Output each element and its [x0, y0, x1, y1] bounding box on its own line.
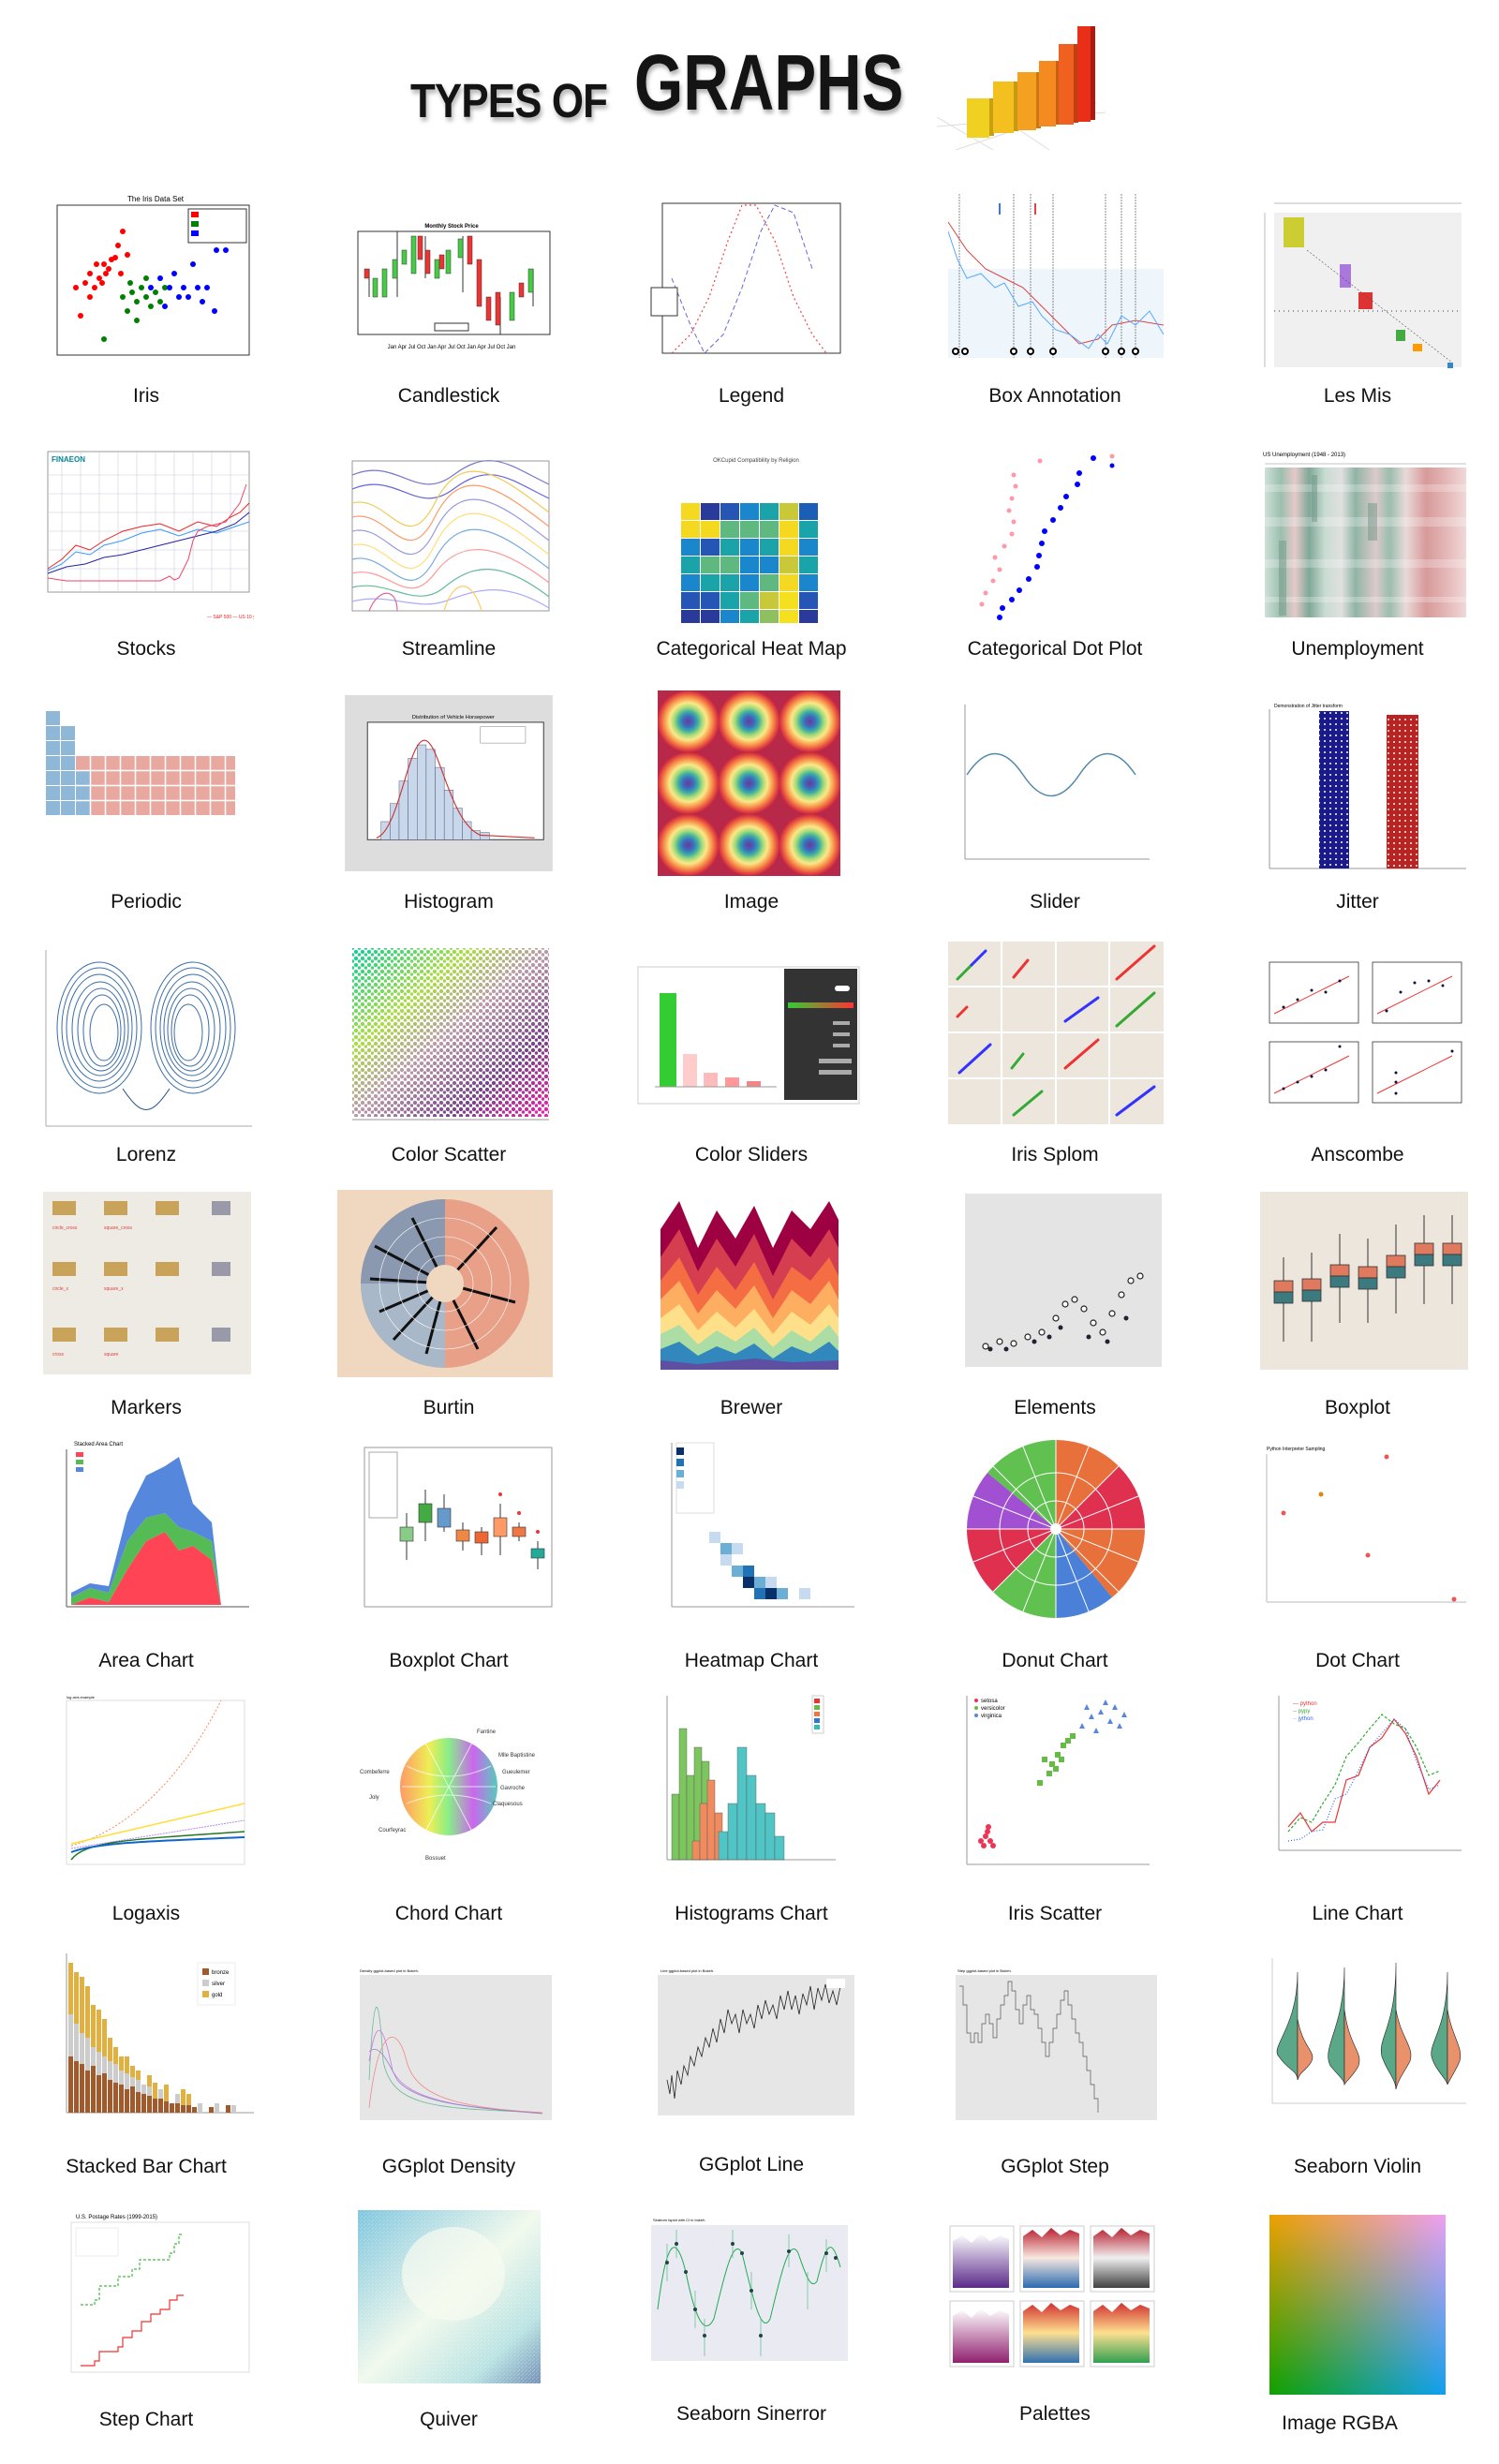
label: GGplot Step: [1001, 2156, 1109, 2177]
label: Dot Chart: [1315, 1650, 1400, 1671]
chart: streamline: [352, 460, 549, 611]
label: Iris Splom: [1011, 1144, 1099, 1165]
chart: line chart: [1278, 1696, 1462, 1851]
chart: candlestick: [358, 223, 551, 350]
label: Categorical Heat Map: [656, 638, 847, 660]
chart: step chart: U.S. Postage Rates (1999-2015): [76, 2215, 157, 2220]
chart: markers: [43, 1192, 251, 1374]
chart: dot chart: Python Interpreter Sampling: [1267, 1447, 1325, 1452]
icon: 3d bar chart: [937, 26, 1106, 150]
chart: categorical heat map: OKCupid Compatibility by Religion: [713, 458, 799, 464]
chart: chord chart: Courfeyrac: [378, 1828, 406, 1833]
chart: jitter: [1269, 704, 1466, 869]
chart: iris scatter: setosa: [981, 1699, 998, 1704]
label: Chord Chart: [395, 1903, 502, 1924]
chart: histogram: [345, 695, 553, 871]
chart: color sliders: [637, 967, 860, 1104]
chart: chord chart: Gueulemer: [502, 1770, 530, 1775]
label: Line Chart: [1313, 1903, 1403, 1924]
chart: lorenz: [45, 950, 252, 1126]
chart: iris scatter: [967, 1696, 1150, 1864]
chart: box annotation: [948, 194, 1164, 358]
label: Seaborn Sinerror: [676, 2403, 826, 2425]
label: Jitter: [1336, 891, 1379, 913]
chart: area chart: Stacked Area Chart: [74, 1442, 123, 1447]
chart: stacked bar chart: silver: [212, 1982, 225, 1987]
chart: seaborn sinerror: [644, 2216, 859, 2392]
title: [410, 38, 905, 127]
label: Lorenz: [116, 1144, 176, 1165]
chart: ggplot line: Line ggplot-based plot in Bokeh.: [660, 1968, 714, 1973]
label: Histogram: [404, 891, 494, 913]
label: Boxplot Chart: [389, 1650, 509, 1671]
chart: candlestick: Jan Apr Jul Oct Jan Apr Jul Oct Jan Apr Jul Oct Jan: [388, 345, 515, 350]
chart: markers: cross: [52, 1352, 64, 1358]
chart: histogram: Distribution of Vehicle Horsepower: [412, 715, 495, 720]
chart: chord chart: [360, 1729, 536, 1862]
chart: logaxis: log axis example: [67, 1695, 96, 1700]
chart: line chart: -- pypy: [1293, 1709, 1310, 1714]
label: Iris Scatter: [1008, 1903, 1102, 1924]
chart: chord chart: Joly: [369, 1795, 379, 1801]
label: Donut Chart: [1002, 1650, 1108, 1671]
label: GGplot Line: [699, 2154, 804, 2175]
chart: line chart: — python: [1293, 1701, 1317, 1707]
chart: dot chart: [1267, 1447, 1466, 1602]
chart: markers: circle_x: [52, 1286, 68, 1292]
chart: iris splom: [948, 942, 1164, 1124]
label: Periodic: [111, 891, 182, 913]
label: Image RGBA: [1282, 2412, 1398, 2434]
chart: boxplot: [1260, 1192, 1468, 1370]
label: Step Chart: [99, 2409, 193, 2430]
label: Seaborn Violin: [1294, 2156, 1421, 2177]
label: Stocks: [116, 638, 176, 660]
chart: ggplot step: [956, 1968, 1157, 2120]
chart: ggplot line: [658, 1968, 854, 2115]
chart: stacked bar chart: [66, 1953, 254, 2114]
title: TYPES OF: [410, 74, 607, 127]
chart: markers: square_x: [104, 1286, 124, 1292]
label: Slider: [1030, 891, 1080, 913]
label: Heatmap Chart: [685, 1650, 818, 1671]
chart: markers: square: [104, 1352, 119, 1358]
chart: line chart: ·· jython: [1293, 1716, 1313, 1722]
chart: ggplot step: Step ggplot-based plot in Bokeh.: [957, 1968, 1012, 1973]
chart: quiver: [341, 2208, 557, 2384]
chart: stocks: [47, 452, 254, 620]
chart: ggplot density: [360, 1968, 552, 2120]
chart: ggplot density: Density ggplot-based plot in Bokeh.: [360, 1968, 419, 1973]
chart: iris: [56, 195, 249, 356]
chart: chord chart: Fantine: [477, 1729, 497, 1735]
label: Brewer: [720, 1397, 782, 1418]
chart: unemployment: US Unemployment (1948 - 2013): [1263, 453, 1345, 458]
chart: step chart: [38, 2211, 254, 2387]
label: Candlestick: [398, 385, 499, 407]
label: Histograms Chart: [675, 1903, 828, 1924]
chart: iris scatter: virginica: [981, 1714, 1002, 1719]
chart: stacked bar chart: gold: [212, 1993, 222, 1998]
chart: area chart: [66, 1441, 249, 1608]
chart: chord chart: Gavroche: [500, 1786, 526, 1791]
chart: histograms chart: [667, 1696, 836, 1861]
chart: categorical heat map: [681, 457, 818, 623]
label: Color Scatter: [392, 1144, 506, 1165]
chart: jitter: Demonstration of Jitter transform: [1274, 704, 1343, 709]
label: Area Chart: [98, 1650, 194, 1671]
chart: markers: circle_cross: [52, 1225, 78, 1231]
label: Legend: [719, 385, 784, 407]
label: Burtin: [423, 1397, 474, 1418]
chart: donut chart: [967, 1440, 1145, 1618]
label: Box Annotation: [988, 385, 1121, 407]
chart: candlestick: Monthly Stock Price: [424, 224, 479, 230]
chart: chord chart: Bossuet: [425, 1856, 446, 1862]
chart: logaxis: [66, 1695, 245, 1864]
label: Elements: [1014, 1397, 1096, 1418]
chart: unemployment: [1263, 452, 1466, 617]
label: Iris: [133, 385, 159, 407]
chart: seaborn violin: [1255, 1953, 1471, 2130]
label: Unemployment: [1291, 638, 1424, 660]
chart: anscombe: [1269, 961, 1462, 1104]
chart: slider: [965, 705, 1150, 860]
chart: chord chart: Mlle Baptistine: [498, 1753, 536, 1759]
chart: iris: The Iris Data Set: [127, 195, 185, 203]
label: Anscombe: [1311, 1144, 1404, 1165]
label: Les Mis: [1324, 385, 1391, 407]
chart: brewer: [660, 1201, 839, 1370]
chart: image rgba: [1269, 2215, 1446, 2395]
chart: boxplot chart: [364, 1447, 553, 1608]
chart: chord chart: Combeferre: [360, 1770, 390, 1775]
label: Color Sliders: [695, 1144, 808, 1165]
chart: categorical dot plot: [980, 453, 1115, 620]
chart: elements: [965, 1194, 1162, 1367]
chart: markers: square_cross: [104, 1225, 133, 1231]
label: GGplot Density: [382, 2156, 515, 2177]
chart: heatmap chart: [671, 1443, 854, 1608]
label: Palettes: [1019, 2403, 1091, 2425]
chart: chord chart: Claquesous: [493, 1802, 523, 1807]
chart: palettes: [948, 2222, 1164, 2398]
label: Streamline: [402, 638, 496, 660]
chart: burtin: [337, 1190, 553, 1377]
label: Quiver: [420, 2409, 478, 2430]
label: Logaxis: [112, 1903, 180, 1924]
chart: les mis: [1265, 202, 1462, 368]
chart: iris scatter: versicolor: [981, 1706, 1005, 1712]
label: Categorical Dot Plot: [968, 638, 1142, 660]
chart: image: [658, 690, 840, 876]
label: Stacked Bar Chart: [66, 2156, 227, 2177]
title: GRAPHS: [634, 38, 904, 126]
chart: color scatter: [352, 948, 549, 1121]
chart: stocks: FINAEON: [52, 455, 85, 464]
label: Image: [724, 891, 779, 913]
chart: seaborn sinerror: Seaborn tsplot with CI in bokeh.: [653, 2218, 705, 2222]
label: Markers: [111, 1397, 182, 1418]
chart: stacked bar chart: bronze: [212, 1970, 230, 1976]
label: Boxplot: [1325, 1397, 1390, 1418]
chart: legend: [650, 202, 841, 354]
chart: periodic: [46, 711, 235, 815]
